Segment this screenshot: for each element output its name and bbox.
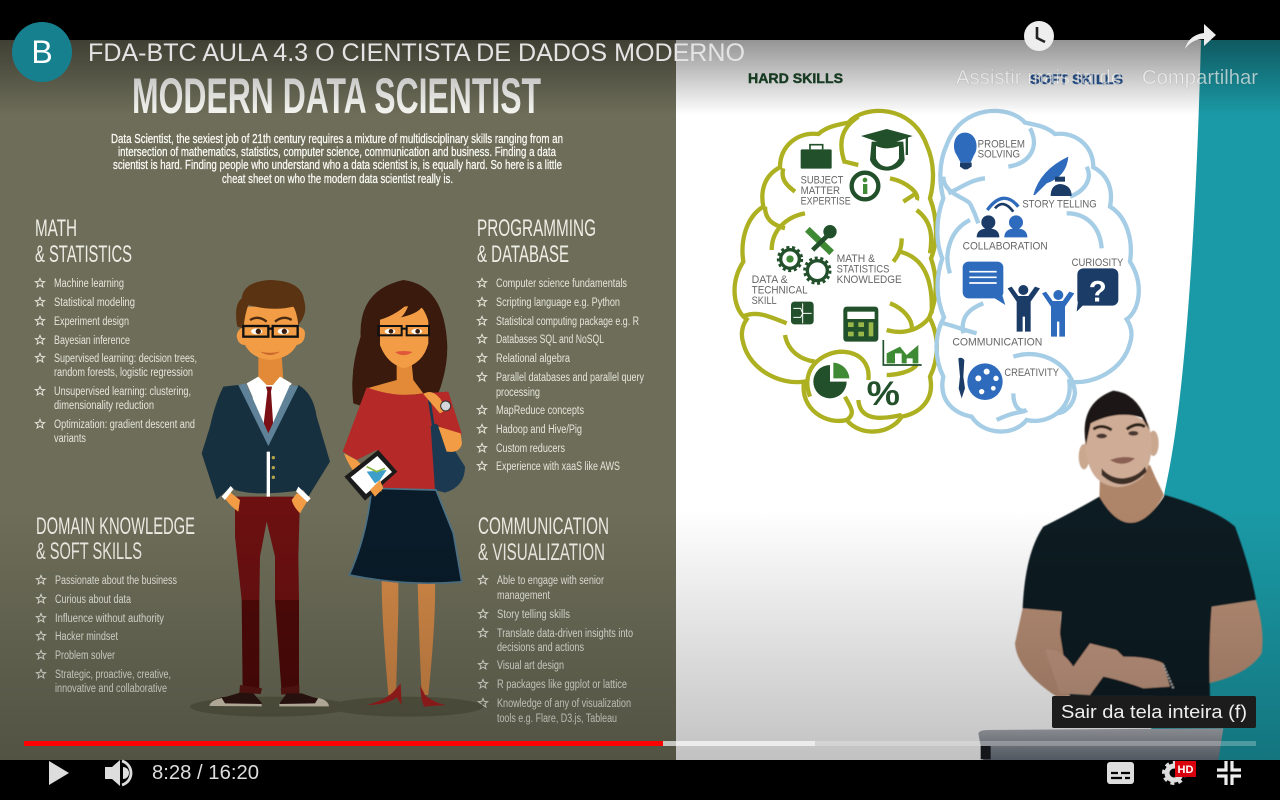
- section: math and statistics: [35, 215, 197, 445]
- list: math and statistics: Experiment design: [54, 316, 129, 328]
- bottom video gradient: [0, 510, 1280, 760]
- icon: play: [49, 761, 69, 785]
- control bar: [0, 760, 1280, 800]
- intro paragraph: intersection of mathematics, statistics, computer science, communication and business. Finding a data: [118, 145, 556, 159]
- diagram: hard skills brain hemisphere: [735, 111, 937, 432]
- infographic title: MODERN DATA SCIENTIST: [132, 68, 541, 124]
- list: math and statistics: [35, 278, 197, 445]
- heading: communication and visualization: [478, 513, 609, 566]
- heading: math and statistics: & STATISTICS: [35, 241, 132, 268]
- list: communication and visualization: Story telling skills: [497, 609, 570, 621]
- brain outline: hard skills: [735, 111, 937, 432]
- intro paragraph: [111, 132, 563, 186]
- list: math and statistics: random forests, logistic regression: [54, 367, 193, 379]
- list: math and statistics: Unsupervised learning: clustering,: [54, 386, 191, 398]
- heading: communication and visualization: & VISUALIZATION: [478, 539, 605, 566]
- list: programming and database: Experience with xaaS like AWS: [496, 461, 620, 473]
- list: communication and visualization: Translate data-driven insights into: [497, 628, 633, 640]
- list: programming and database: [477, 278, 644, 473]
- icon: info: [852, 173, 878, 199]
- list: math and statistics: Bayesian inference: [54, 335, 130, 347]
- list: math and statistics: Optimization: gradient descent and: [54, 419, 195, 431]
- list: math and statistics: Supervised learning: decision trees,: [54, 353, 197, 365]
- watch later button: [956, 21, 1122, 89]
- labels: soft skills: COMMUNICATION: [952, 337, 1042, 349]
- list: programming and database: Relational algebra: [496, 353, 570, 365]
- labels: soft skills: COLLABORATION: [963, 240, 1048, 252]
- labels: hard skills: SUBJECT: [801, 174, 844, 186]
- heading: programming and database: & DATABASE: [477, 241, 569, 268]
- labels: hard skills: KNOWLEDGE: [837, 274, 902, 286]
- list: communication and visualization: tools e.g. Flare, D3.js, Tableau: [497, 713, 617, 725]
- list: math and statistics: Statistical modeling: [54, 297, 135, 309]
- list: programming and database: Hadoop and Hive/Pig: [496, 424, 582, 436]
- labels: hard skills: STATISTICS: [837, 264, 889, 276]
- icon: chip: [791, 302, 814, 324]
- list: programming and database: Custom reducers: [496, 443, 565, 455]
- list: domain knowledge: Hacker mindset: [55, 631, 119, 643]
- labels: hard skills: MATTER: [801, 185, 840, 197]
- teal slide shape: [1150, 40, 1280, 760]
- list: programming and database: Computer science fundamentals: [496, 278, 627, 290]
- icon: question bubble: ?: [1089, 276, 1107, 309]
- list: math and statistics: Machine learning: [54, 278, 124, 290]
- section: programming and database: [477, 215, 644, 473]
- icon: pie chart: [813, 363, 849, 398]
- icon: palette: [967, 363, 1003, 400]
- list: domain knowledge: Influence without authority: [55, 613, 164, 625]
- progress bar: [24, 741, 1256, 746]
- icon: graduate: [861, 129, 913, 171]
- icon: settings with HD badge: [1164, 761, 1196, 784]
- icon: quill and ink: [1033, 157, 1072, 196]
- labels: soft skills: STORY TELLING: [1022, 199, 1097, 211]
- list: domain knowledge: Curious about data: [55, 594, 131, 606]
- labels: hard skills: MATH &: [837, 253, 875, 265]
- list: math and statistics: dimensionality reduction: [54, 400, 154, 412]
- labels: soft skills: CREATIVITY: [1004, 367, 1059, 379]
- intro paragraph: cheat sheet on who the modern data scientist really is.: [222, 172, 453, 186]
- icon: people cheering: [1008, 285, 1074, 337]
- list: programming and database: Databases SQL and NoSQL: [496, 334, 604, 346]
- labels: hard skills: [752, 174, 902, 307]
- icon: paint brush: [958, 358, 965, 398]
- icon: settings with HD badge: HD: [1178, 764, 1193, 776]
- list: programming and database: MapReduce concepts: [496, 405, 584, 417]
- channel avatar: [12, 22, 72, 82]
- labels: hard skills: DATA &: [752, 274, 788, 286]
- list: communication and visualization: Knowledge of any of visualization: [497, 698, 631, 710]
- labels: hard skills: SKILL: [752, 295, 777, 307]
- heading: programming and database: PROGRAMMING: [477, 215, 596, 242]
- share button: Compartilhar: [1142, 67, 1258, 89]
- list: programming and database: Scripting language e.g. Python: [496, 297, 620, 309]
- top video gradient: [0, 40, 1280, 115]
- list: domain knowledge: [36, 575, 177, 695]
- list: communication and visualization: [478, 575, 633, 725]
- illustration: female data scientist: [330, 280, 483, 717]
- video background: infographic panel: [0, 40, 676, 760]
- video title: FDA-BTC AULA 4.3 O CIENTISTA DE DADOS MODERNO: [88, 39, 745, 67]
- list: domain knowledge: Problem solver: [55, 650, 115, 662]
- icon: briefcase: [801, 145, 832, 169]
- tooltip: exit fullscreen: Sair da tela inteira (f): [1061, 702, 1247, 722]
- heading: domain knowledge: & SOFT SKILLS: [36, 538, 142, 565]
- brain outline: soft skills: [937, 111, 1139, 432]
- icon: subtitles: [1107, 762, 1134, 784]
- channel avatar: B: [31, 34, 53, 70]
- intro paragraph: scientist is hard. Finding people who understand who a data scientist is, is equally hard. So here is a little: [113, 158, 562, 172]
- list: programming and database: Parallel databases and parallel query: [496, 372, 644, 384]
- label: soft skills: SOFT SKILLS: [1030, 72, 1123, 87]
- list: communication and visualization: Visual art design: [497, 660, 564, 672]
- watch later button: Assistir mais tarde: [956, 67, 1122, 89]
- time display: 8:28 / 16:20: [152, 762, 259, 784]
- list: domain knowledge: Strategic, proactive, creative,: [55, 669, 171, 681]
- labels: soft skills: PROBLEM: [978, 138, 1025, 150]
- icon: chart: [883, 340, 922, 365]
- share button: [1142, 24, 1258, 89]
- list: communication and visualization: Able to engage with senior: [497, 575, 604, 587]
- list: math and statistics: variants: [54, 433, 86, 445]
- labels: hard skills: EXPERTISE: [801, 195, 851, 207]
- heading: math and statistics: [35, 215, 132, 268]
- diagram: soft skills brain hemisphere: [937, 111, 1139, 432]
- icon: calculator: [843, 307, 878, 342]
- icon: volume: [105, 760, 131, 786]
- list: programming and database: Statistical computing package e.g. R: [496, 316, 639, 328]
- icon: gears: [778, 247, 830, 283]
- label: hard skills: HARD SKILLS: [748, 71, 843, 86]
- heading: domain knowledge: DOMAIN KNOWLEDGE: [36, 513, 195, 540]
- icon: tools: [807, 225, 837, 253]
- tooltip: exit fullscreen: [1052, 696, 1256, 728]
- intro paragraph: Data Scientist, the sexiest job of 21th century requires a mixture of multidisciplinary skills ranging from an: [111, 132, 563, 146]
- icon: light bulb: [954, 133, 977, 169]
- heading: communication and visualization: COMMUNICATION: [478, 513, 609, 540]
- video background: slide: [676, 40, 1280, 760]
- icon: percent: %: [867, 375, 900, 413]
- icon: question bubble: [1077, 268, 1118, 312]
- labels: soft skills: SOLVING: [978, 148, 1020, 160]
- list: domain knowledge: innovative and collaborative: [55, 683, 167, 695]
- labels: soft skills: CURIOSITY: [1072, 257, 1123, 269]
- list: communication and visualization: R packages like ggplot or lattice: [497, 679, 627, 691]
- icon: collaboration: [977, 198, 1027, 237]
- illustration: male data scientist: [190, 280, 350, 717]
- section: communication and visualization: [478, 513, 633, 725]
- list: domain knowledge: Passionate about the business: [55, 575, 177, 587]
- heading: domain knowledge: [36, 513, 195, 565]
- presenter: [978, 391, 1263, 760]
- icon: speech bubble: [963, 262, 1005, 305]
- list: communication and visualization: decisions and actions: [497, 642, 584, 654]
- icon: exit fullscreen: [1217, 761, 1241, 785]
- section: domain knowledge and soft skills: [36, 513, 195, 695]
- labels: soft skills: [952, 138, 1123, 379]
- list: programming and database: processing: [496, 387, 540, 399]
- heading: math and statistics: MATH: [35, 215, 77, 242]
- labels: hard skills: TECHNICAL: [752, 284, 808, 296]
- list: communication and visualization: management: [497, 590, 551, 602]
- heading: programming and database: [477, 215, 596, 268]
